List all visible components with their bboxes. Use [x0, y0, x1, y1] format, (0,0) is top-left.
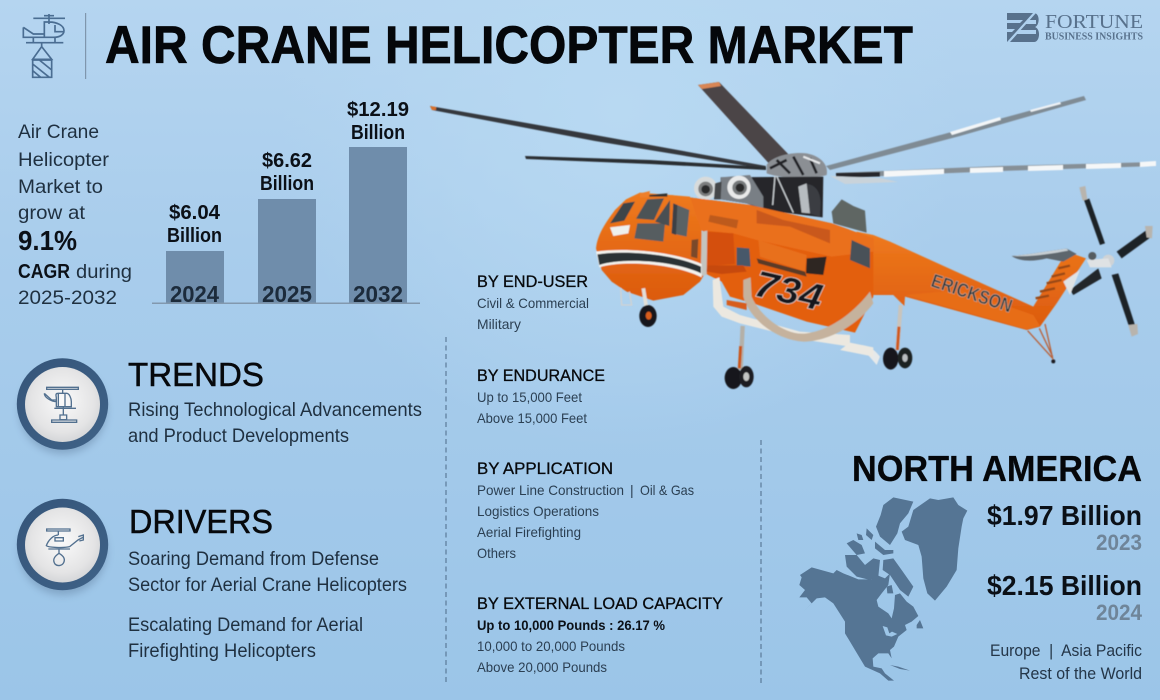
- value: 2023: 2023: [1096, 530, 1142, 555]
- fuselage: [596, 175, 873, 389]
- segment: by end-user: [477, 272, 589, 332]
- text block: CAGR summary: grow at: [18, 202, 86, 224]
- logo: Fortune Business Insights: [1007, 11, 1143, 42]
- value: 2023: [987, 500, 1142, 555]
- bar chart: market size: 2032: [353, 281, 403, 307]
- segment: by application: Power Line Construction: [477, 482, 624, 498]
- text block: CAGR summary: Market to: [18, 176, 103, 198]
- logo: Fortune Business Insights: FORTUNE: [1045, 11, 1143, 33]
- value: 2024: 2024: [1096, 600, 1143, 625]
- tail boom and rear fuselage: [857, 186, 1153, 370]
- heading: North America: NORTH AMERICA: [852, 448, 1142, 489]
- segment: by external load capacity: [477, 594, 723, 675]
- main rotor blades: [430, 82, 1156, 184]
- value: 2023: $1.97 Billion: [987, 500, 1142, 531]
- tail pylon horizontal stabilizer: [1012, 249, 1077, 262]
- segment: by endurance: Above 15,000 Feet: [477, 410, 587, 426]
- tail rotor: [1063, 186, 1153, 337]
- segment: by external load capacity: 10,000 to 20,000 Pounds: [477, 638, 625, 654]
- bar: 2025: [258, 199, 316, 303]
- crane section body: [670, 195, 873, 333]
- bar chart: market size: 2025: [262, 281, 312, 307]
- segment: by external load capacity: Above 20,000 Pounds: [477, 659, 607, 675]
- bar chart: market size: [152, 99, 420, 307]
- text block: CAGR summary: 9.1%: [18, 225, 77, 256]
- segment: by application: BY APPLICATION: [477, 459, 613, 478]
- text: other regions: [990, 641, 1142, 683]
- icon: drivers helicopter badge: [17, 499, 108, 595]
- text block: CAGR summary: [18, 121, 132, 309]
- text block: CAGR summary: 2025-2032: [18, 287, 117, 309]
- bar chart: market size: Billion: [167, 225, 222, 247]
- value: 2024: [987, 570, 1143, 625]
- text: trends description: Rising Technological Advancements: [128, 399, 422, 421]
- bar chart: market size: $6.62: [262, 150, 312, 172]
- bar chart: market size: $6.04: [169, 202, 221, 224]
- divider: header: [85, 13, 86, 79]
- bar chart: market size: Billion: [260, 173, 314, 195]
- logo: Fortune Business Insights: BUSINESS INSIGHTS: [1045, 32, 1143, 42]
- segment: by end-user: Military: [477, 316, 521, 332]
- helicopter photo illustration: [430, 82, 1156, 389]
- text: driver two: Escalating Demand for Aerial: [128, 614, 363, 636]
- text: trends description: and Product Developments: [128, 425, 349, 447]
- bar: 2032: [349, 147, 407, 303]
- panel: trends: [17, 357, 422, 454]
- text: other regions: Rest of the World: [1019, 664, 1142, 683]
- bar chart: market size: $12.19: [347, 99, 409, 121]
- heading: trends: TRENDS: [128, 357, 264, 394]
- text: driver one: Soaring Demand from Defense: [128, 548, 379, 570]
- text block: CAGR summary: CAGR: [18, 261, 70, 283]
- engine housing: [721, 177, 823, 217]
- segment: by endurance: BY ENDURANCE: [477, 366, 605, 385]
- text: driver one: Sector for Aerial Crane Helicopters: [128, 574, 407, 596]
- segment: by external load capacity: Up to 10,000 Pounds : 26.17 %: [477, 617, 666, 633]
- text block: CAGR summary: Helicopter: [18, 149, 110, 171]
- segment: by application: Logistics Operations: [477, 503, 599, 519]
- rear landing gear: [897, 305, 901, 350]
- segment: by application: [477, 459, 694, 561]
- title: AIR CRANE HELICOPTER MARKET: [105, 16, 913, 75]
- gear on spine: [832, 199, 867, 233]
- rotor hub: [767, 153, 827, 178]
- segment: by endurance: [477, 366, 605, 426]
- cheat stripe: [596, 250, 702, 277]
- cockpit windows: [610, 202, 635, 223]
- tail lettering: ERICKSON: [928, 271, 1015, 317]
- text: driver one: [128, 548, 407, 596]
- segment: by application: Oil & Gas: [640, 482, 694, 498]
- text: driver two: [128, 614, 363, 662]
- panel: drivers: [17, 499, 407, 662]
- icon: header helicopter with cargo: [23, 14, 65, 77]
- panel: segmentation: [477, 272, 723, 675]
- bay interior: [707, 232, 735, 266]
- segment: by endurance: Up to 15,000 Feet: [477, 389, 582, 405]
- bar chart: market size: Billion: [351, 122, 405, 144]
- text block: CAGR summary: Air Crane: [18, 121, 99, 143]
- segment: by end-user: BY END-USER: [477, 272, 588, 291]
- text: trends description: [128, 399, 422, 447]
- text: other regions: Europe | Asia Pacific: [990, 641, 1142, 660]
- value: 2024: $2.15 Billion: [987, 570, 1142, 601]
- aircraft number: 734: [751, 262, 827, 319]
- nose gear: [621, 288, 632, 305]
- segment: by application: Others: [477, 545, 516, 561]
- lower frame and hose: [713, 277, 850, 347]
- panel: regional: [799, 448, 1143, 683]
- segment: by end-user: Civil & Commercial: [477, 295, 589, 311]
- icon: trends helicopter badge: [17, 358, 108, 454]
- text block: CAGR summary: during: [76, 261, 132, 283]
- segment: by application: |: [630, 482, 634, 498]
- bar chart: market size: 2024: [170, 281, 219, 307]
- text: driver two: Firefighting Helicopters: [128, 640, 316, 662]
- tail skid: [1028, 324, 1053, 358]
- heading: drivers: DRIVERS: [129, 504, 273, 541]
- segment: by external load capacity: BY EXTERNAL LOAD CAPACITY: [477, 594, 723, 613]
- map: North America: [799, 497, 967, 681]
- bar: 2024: [166, 251, 224, 303]
- main landing gear: [741, 326, 743, 370]
- segment: by application: Aerial Firefighting: [477, 524, 581, 540]
- cockpit nose: [596, 193, 705, 301]
